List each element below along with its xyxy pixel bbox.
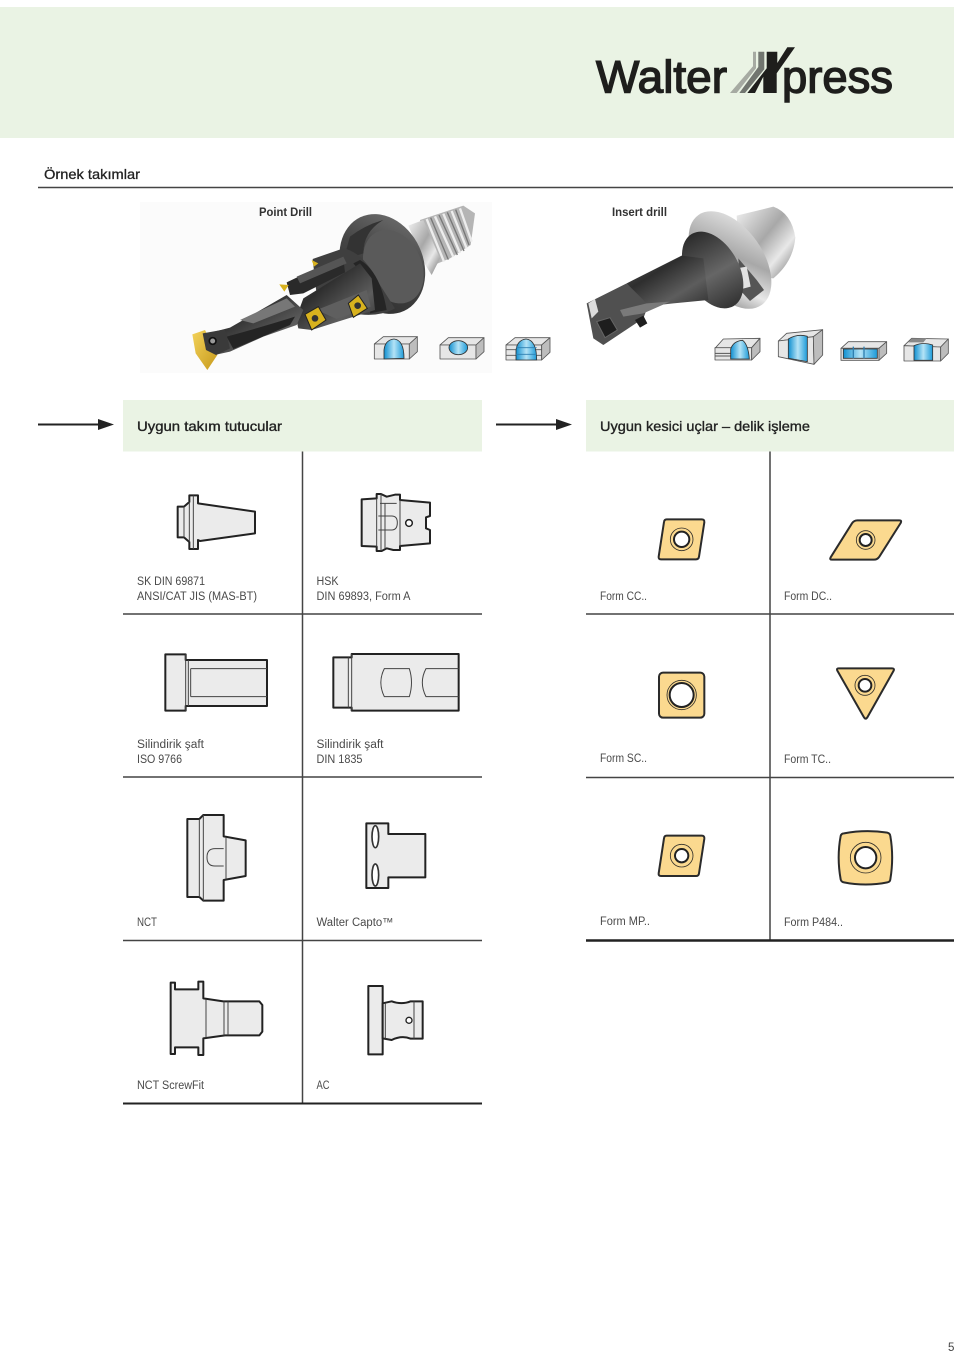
section title: Örnek takımlar [44, 165, 140, 182]
heading panel: suitable holders [123, 400, 482, 452]
arrow: to holders [38, 419, 114, 430]
logo: Walter Xpress [596, 47, 893, 102]
photo panel: insert drill [587, 196, 948, 364]
label: HSK: HSK [316, 576, 339, 588]
photo panel: point drill [140, 200, 550, 373]
label: DIN 1835: Silindirik şaft [316, 739, 384, 751]
holder: Walter Capto [316, 823, 425, 929]
heading panel: suitable inserts: Uygun kesici uçlar – delik işleme [600, 418, 810, 434]
logo: Walter Xpress: press [782, 52, 893, 102]
page number: 5 [948, 1342, 954, 1354]
hole icon: counterbore [440, 338, 484, 359]
insert: Form P484 [784, 831, 892, 929]
heading panel: suitable inserts [586, 400, 954, 452]
icon: AC holder [368, 986, 423, 1054]
label: Form P484: Form P484.. [784, 917, 843, 929]
hole icon: stepped block [904, 338, 948, 361]
icon: MP insert [659, 836, 704, 876]
label: ScrewFit: NCT ScrewFit [137, 1080, 205, 1092]
label: DIN 1835: DIN 1835 [316, 754, 362, 766]
insert drill label: Insert drill [612, 207, 667, 219]
label: ISO 9766: Silindirik şaft [137, 739, 205, 751]
label: SK DIN: SK DIN 69871 [137, 576, 205, 588]
insert drill photo [587, 196, 795, 345]
hole icon: stacked block [715, 338, 760, 360]
label: NCT: NCT [137, 917, 157, 929]
icon: ScrewFit holder [171, 982, 262, 1055]
icon: DC insert [830, 520, 901, 560]
holder: NCT ScrewFit [137, 982, 262, 1092]
hole icon: through hole [374, 337, 417, 359]
icon: P484 insert [839, 831, 892, 884]
icon: CC insert [659, 519, 704, 559]
label: Form DC: Form DC.. [784, 591, 832, 603]
holder: ISO 9766 [137, 654, 267, 766]
label: Form SC: Form SC.. [600, 753, 647, 765]
point drill photo [192, 200, 475, 370]
label: ISO 9766: ISO 9766 [137, 754, 182, 766]
icon: cylindrical shank ISO [165, 654, 267, 711]
heading panel: suitable holders: Uygun takım tutucular [137, 418, 282, 434]
icon: Capto holder [366, 823, 425, 888]
label: Form CC: Form CC.. [600, 591, 647, 603]
icon: SC insert [659, 673, 704, 718]
hole icon: deep hole [778, 330, 823, 364]
insert: Form TC [784, 668, 894, 766]
label: Capto: Walter Capto™ [316, 917, 394, 929]
insert: Form DC [784, 520, 901, 603]
insert: Form SC [600, 673, 704, 765]
icon: NCT holder [187, 815, 246, 901]
header band [0, 7, 954, 138]
label: Form MP: Form MP.. [600, 916, 650, 928]
icon: HSK holder [362, 494, 430, 551]
holder: NCT [137, 815, 246, 929]
insert: Form CC [600, 519, 704, 603]
point drill label: Point Drill [259, 207, 312, 219]
label: AC: AC [316, 1080, 330, 1092]
logo: Walter Xpress: Walter [596, 52, 727, 102]
holder: DIN 1835 [316, 654, 459, 766]
holder: AC [316, 986, 423, 1092]
holder: HSK [316, 494, 430, 603]
holder: SK DIN 69871 [137, 495, 257, 603]
label: SK DIN: ANSI/CAT JIS (MAS-BT) [137, 591, 257, 603]
label: HSK: DIN 69893, Form A [316, 591, 411, 603]
label: Form TC: Form TC.. [784, 754, 831, 766]
icon: cylindrical shank DIN [333, 654, 459, 711]
hole icon: grooved bore [841, 342, 887, 360]
icon: SK holder [178, 495, 255, 549]
arrow: to inserts [496, 419, 572, 430]
hole icon: stacked plates [506, 338, 550, 360]
icon: TC insert [837, 668, 894, 719]
insert: Form MP [600, 836, 704, 928]
